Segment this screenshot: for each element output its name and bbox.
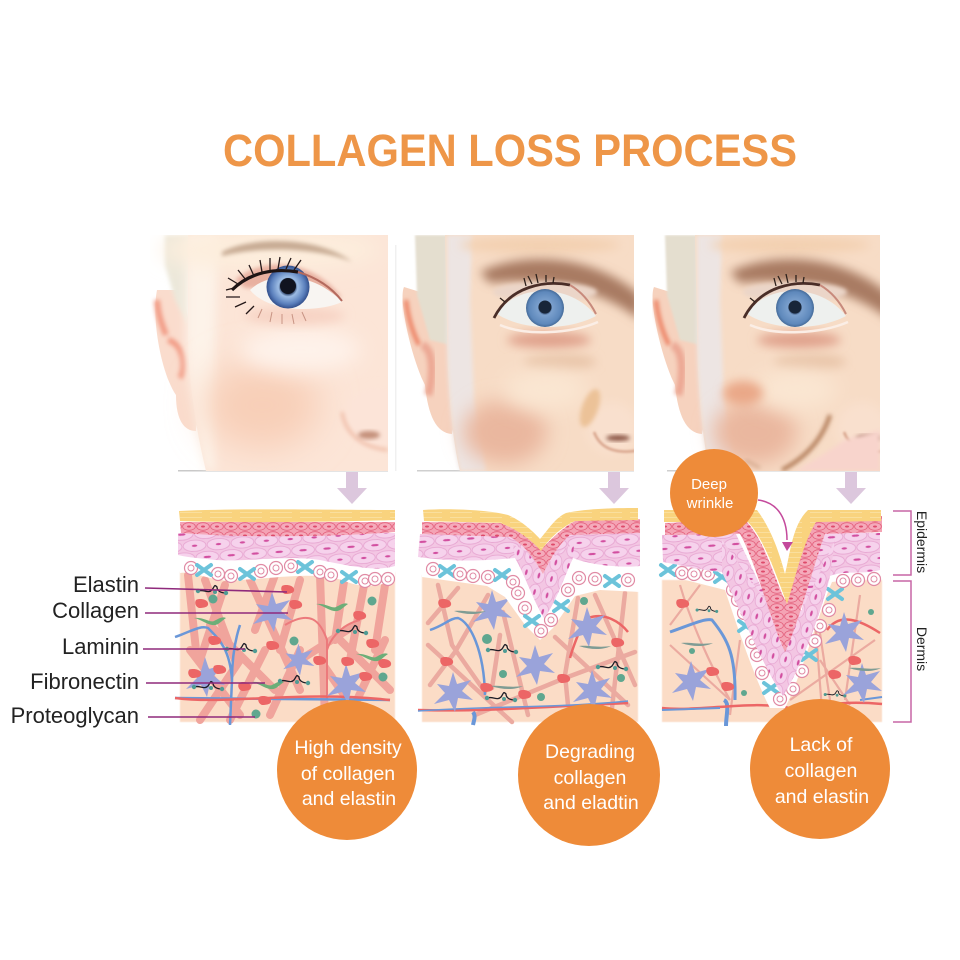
callout: degrading: collagen xyxy=(554,767,626,789)
panel: advanced aging face photo xyxy=(653,235,890,472)
skin diagram: high density xyxy=(175,509,395,725)
callout: deep wrinkle: Deep xyxy=(691,476,727,493)
sub: eyelid xyxy=(235,265,342,298)
legend labels: Fibronectin xyxy=(30,669,139,694)
legend labels xyxy=(11,572,139,728)
sub: blue fibres and stars xyxy=(670,620,735,700)
panel: youthful face photo xyxy=(155,230,410,472)
legend labels: Elastin xyxy=(73,572,139,597)
bracket: epidermis xyxy=(893,511,911,575)
label: epidermis: Epidermis xyxy=(914,511,930,573)
sub: red layer xyxy=(180,522,395,536)
skin diagram: degrading xyxy=(418,508,640,725)
sub: collagen fibres xyxy=(428,585,635,722)
callout: lack of: and elastin xyxy=(775,786,869,808)
sub: collagen fibres xyxy=(188,575,390,720)
sub: dermis xyxy=(180,572,395,722)
sub: red layer xyxy=(665,516,882,652)
callout: lack of: Lack of xyxy=(790,734,853,756)
sub: fibronectin and matrix molecules xyxy=(486,645,518,654)
sub: ear xyxy=(155,290,200,431)
skin diagram: deep wrinkle xyxy=(661,510,882,726)
sub: red blobs xyxy=(438,599,451,608)
sub: dermis xyxy=(422,575,638,722)
sub: dermis xyxy=(662,580,882,722)
sub: yellow layer xyxy=(664,510,881,604)
sub: basal layer xyxy=(180,560,395,586)
callout: high density: High density xyxy=(294,737,402,759)
label: dermis: Dermis xyxy=(914,627,930,671)
legend labels: Proteoglycan xyxy=(11,703,139,728)
sub: blue fibres and stars xyxy=(175,625,390,725)
sub: basal layer xyxy=(662,562,882,708)
title: COLLAGEN LOSS PROCESS xyxy=(223,125,797,176)
sub: red blobs xyxy=(281,585,294,594)
sub: spinous layer xyxy=(662,532,880,696)
callout: degrading: and eladtin xyxy=(543,792,639,814)
sub: fibres xyxy=(670,585,875,715)
callout: high density: and elastin xyxy=(302,788,396,810)
sub: eye xyxy=(250,277,342,309)
sub: blue and red fibres xyxy=(430,618,485,695)
sub: yellow layer xyxy=(423,508,638,551)
legend labels: Collagen xyxy=(52,598,139,623)
callout: degrading xyxy=(518,704,660,846)
sub: basal layer xyxy=(420,556,640,640)
callout: degrading: Degrading xyxy=(545,741,635,763)
sub: red layer xyxy=(422,519,640,574)
sub: yellow layer xyxy=(179,509,395,522)
bracket: dermis xyxy=(893,581,911,722)
sub: fibronectin and proteoglycan xyxy=(196,586,228,595)
sub: spinous layer xyxy=(178,533,395,568)
arrow: first stage xyxy=(337,472,367,504)
callout: high density xyxy=(277,700,417,840)
callout: deep wrinkle: wrinkle xyxy=(686,495,733,512)
callout: lack of xyxy=(750,699,890,839)
callout: lack of: collagen xyxy=(785,760,857,782)
callout: high density: of collagen xyxy=(301,763,395,785)
panel: early aging face photo xyxy=(403,235,640,472)
legend labels: Laminin xyxy=(62,634,139,659)
legend leader lines xyxy=(143,588,288,717)
sub: stars xyxy=(473,590,512,630)
arrow: third stage xyxy=(836,472,866,504)
sub: spinous layer xyxy=(418,532,640,618)
callout: deep wrinkle xyxy=(670,449,758,537)
arrow: second stage xyxy=(599,472,629,504)
sub: green fibres xyxy=(194,617,226,625)
sub: nose xyxy=(346,388,410,448)
arrow: wrinkle pointer xyxy=(758,500,793,551)
